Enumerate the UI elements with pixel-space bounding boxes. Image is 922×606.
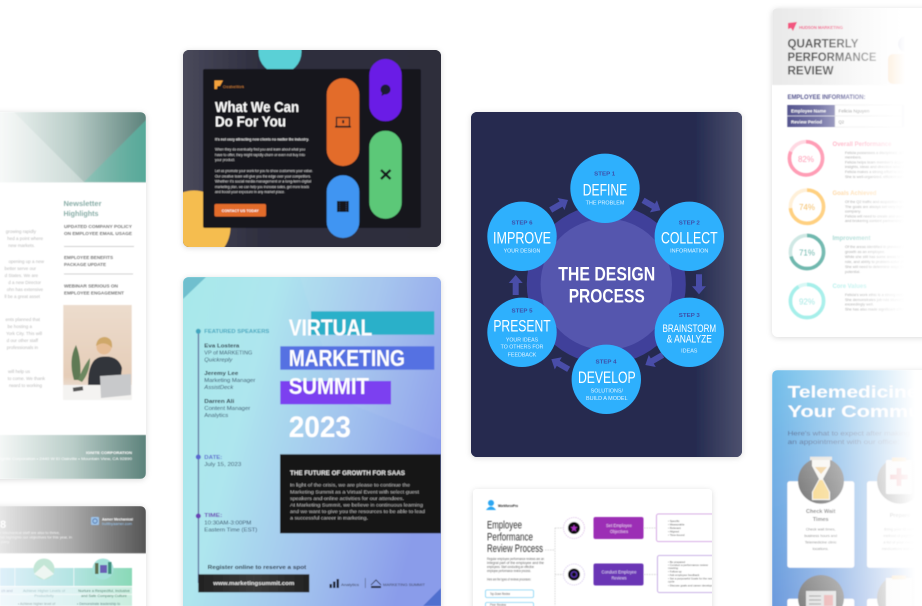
center hub [527, 205, 686, 364]
connector lines [545, 528, 657, 606]
subheading: Here's what to expect after making [788, 431, 910, 438]
card: lower left [787, 575, 854, 606]
table header row: Productivity [34, 594, 54, 598]
article text: better serve our [4, 266, 37, 271]
body text [215, 138, 313, 194]
timeline: DATE: [204, 455, 223, 461]
step: conduct employee reviews: Reviews [612, 576, 626, 580]
employee information table: Felicia Nguyen [838, 108, 870, 114]
timeline: Eastern Time (EST) [204, 528, 258, 534]
intro text: employees. Start conducting an effective [487, 565, 534, 569]
ring: overall performance: 82% [798, 155, 814, 164]
ring: core values: exceedingly well. [845, 302, 874, 306]
timeline: Content Manager [204, 406, 251, 412]
step 2 [655, 202, 724, 271]
ring: goals achieved [790, 190, 913, 223]
ring: improvement: Of the areas identified in previous periods [845, 245, 915, 249]
ring: improvement: Improvement [832, 236, 870, 242]
ring: goals achieved: Of the Q2 traffic and acquisition targets [845, 200, 911, 204]
body text: When they do eventually find you and learn about what you [215, 148, 305, 152]
article text: professionals in [7, 345, 38, 350]
card: prepare: method of payment, [883, 534, 917, 538]
description box: a successful career in marketing. [290, 516, 368, 521]
body text: Let us promote your work for you to show customers your value. [215, 169, 313, 173]
panel: newsletter [0, 112, 146, 479]
center hub: THE DESIGN [558, 265, 655, 286]
newsletter highlights: ON EMPLOYEE EMAIL USAGE [64, 231, 132, 236]
ring: improvement: growth as an employee. [845, 250, 885, 254]
title blocks: MARKETING [289, 345, 405, 371]
heading: Telemedicine In [788, 382, 922, 401]
article text [4, 229, 46, 388]
intro text: integral part of the employee and the [487, 561, 544, 565]
newsletter highlights: UPDATED COMPANY POLICY [64, 224, 132, 229]
title blocks [280, 311, 434, 444]
table header row: and Safe Company Culture [81, 594, 127, 598]
step 2: STEP 2 [679, 220, 700, 226]
review type boxes [486, 590, 534, 606]
body text: marketing plan, we can help you increase sales, get more leads [215, 185, 309, 189]
article text: hed a point where [7, 236, 43, 241]
step: conduct employee reviews [564, 556, 722, 592]
title blocks: VIRTUAL [289, 315, 372, 341]
body text: It's not easy attracting new clients no matter the industry. [215, 138, 309, 142]
step 5 [487, 298, 557, 367]
footer band [0, 435, 146, 479]
header band: Aamer Mechanical [102, 518, 133, 522]
timeline: July 15, 2023 [204, 462, 242, 468]
step 5: STEP 5 [512, 308, 533, 314]
step: conduct employee reviews: • Set a purposeful Goals for the next [668, 576, 713, 580]
illustration: team icon [92, 558, 114, 580]
ring: goals achieved: company. [845, 210, 861, 214]
timeline: Darren Ali [204, 399, 235, 405]
footer band: Ignite Corporation • 2440 W El Oakville • Mountain View, CA 92890 [0, 457, 132, 461]
employee information table: Employee Name [791, 108, 827, 114]
ring: core values: Felicia's work ethic is a strong reflection [845, 293, 912, 297]
ring: improvement: potential. [845, 270, 860, 274]
pill: orange laptop [327, 78, 359, 166]
heading: Employee [487, 520, 522, 532]
step 6: YOUR DESIGN [504, 248, 540, 254]
article text: ll be a great asset [4, 294, 41, 299]
panel: quarterly performance review [772, 8, 922, 337]
step: set employee objectives: • Measurable [668, 522, 685, 526]
step 1: STEP 1 [594, 172, 616, 178]
title blocks: 2023 [289, 411, 351, 444]
intro text: Here are the types of reviews processes: [487, 578, 531, 582]
header band: builtbyaamer.com [102, 522, 132, 526]
header band: that highlights our objectives for this year, in [0, 536, 72, 540]
article text: growing rapidly [6, 229, 37, 234]
step 4 [572, 345, 641, 414]
ring: goals achieved: 74% [799, 203, 815, 212]
description box: In light of the crisis, we are please to continue the [290, 483, 411, 488]
table header row: ch and [1, 589, 13, 593]
newsletter highlights [64, 201, 134, 296]
article text: rward to working [9, 383, 42, 388]
timeline: Analytics [204, 413, 229, 419]
intro text: Regular employee performance reviews are an [487, 557, 544, 561]
header band: REVIEW [788, 64, 834, 78]
pill: green cross [369, 131, 402, 219]
logo: WorkforcePro [498, 504, 518, 508]
card: prepare [867, 458, 922, 568]
timeline: Eva Lostera [204, 344, 240, 350]
ring: overall performance: Felicia makes a strong effort to educate [845, 170, 911, 174]
ring: core values: She demonstrates job role stunning [845, 298, 905, 302]
timeline: Quickreply [204, 358, 233, 364]
arrows [509, 194, 706, 375]
header band: PERFORMANCE [788, 50, 876, 64]
step: set employee objectives [564, 514, 722, 542]
timeline [196, 329, 270, 583]
header band [772, 8, 900, 85]
illustration: mountain icon [34, 558, 54, 580]
header band: HUDSON MARKETING [799, 25, 844, 30]
step 1: DEFINE [583, 182, 627, 200]
ring: core values [790, 284, 912, 318]
timeline: AssistDeck [203, 385, 234, 391]
card: prepare: Bring your ID card, [884, 528, 916, 532]
article text: new markets. [8, 243, 35, 248]
pill: blue film [327, 175, 359, 238]
step 3: & ANALYZE [667, 334, 712, 346]
step 5: FEEDBACK [508, 352, 536, 358]
table header row: • Achieve higher level of [18, 602, 55, 606]
ring: overall performance: members. [845, 156, 862, 160]
ring: goals achieved: and brokering content partnerships more [845, 219, 913, 223]
heading: Your Community [788, 402, 922, 421]
card: check wait times: Check wait times, [806, 528, 836, 532]
body text: Whether it's social media management or a long-term digital [215, 180, 311, 184]
step 3: STEP 3 [679, 313, 701, 319]
timeline: VP of MARKETING [204, 350, 252, 356]
step 4: BUILD A MODEL [586, 396, 628, 402]
article text: be hosting a [7, 324, 32, 329]
panel: the design process [468, 109, 745, 460]
step 5: TO OTHERS FOR [501, 345, 543, 351]
description box: Marketing Summit as a Virtual Event with select guest [290, 489, 420, 494]
ring: improvement: While she still has some areas to improve [845, 255, 915, 259]
step: conduct employee reviews: • Conduct a performance review [668, 563, 709, 567]
table header row: Achieve Higher Levels of [23, 589, 66, 593]
ring: core values: Core Values [832, 284, 867, 290]
article text: d a new Director [8, 280, 41, 285]
card: prepare: Prepare [890, 513, 910, 519]
panel: what we can do for you [181, 49, 443, 250]
article text: ents planned that [5, 317, 41, 322]
card: prepare: a list of your current [883, 540, 918, 544]
heading [214, 100, 300, 128]
register call to action: www.marketingsummit.com [212, 581, 295, 587]
ring: overall performance: She is well-organized, efficient with time [845, 175, 912, 179]
timeline: FEATURED SPEAKERS [204, 329, 270, 335]
step: conduct employee reviews: • Be prepared [668, 560, 686, 564]
step: set employee objectives: • Specific [668, 519, 680, 523]
logo [486, 500, 518, 510]
body text: have to offer, they might rapidly churn or even not buy into [215, 153, 305, 157]
step: set employee objectives: • Time-bound [668, 533, 685, 537]
panel: annual report [0, 506, 146, 606]
newsletter highlights: PACKAGE UPDATE [64, 262, 106, 267]
footer band: IGNITE CORPORATION [86, 451, 132, 455]
timeline: 10:30AM-3:00PM [204, 520, 251, 526]
description box: speakers and online activities for our attendees. [290, 496, 404, 501]
timeline: TIME: [204, 513, 223, 519]
step 1 [570, 154, 640, 223]
step: set employee objectives: • Aligned [668, 530, 679, 534]
step 6: IMPROVE [493, 230, 551, 248]
review type boxes: Top-Down Review [490, 592, 511, 596]
article text: opening up a new [8, 259, 45, 264]
step: set employee objectives: • Relevant [668, 526, 681, 530]
description box [280, 454, 441, 533]
description box: At Marketing Summit, we believe in continuous learning [290, 502, 424, 507]
step 6 [487, 202, 557, 271]
employee information table: Q2 [838, 120, 845, 124]
heading: What We Can [215, 99, 299, 116]
newsletter highlights: EMPLOYEE BENEFITS [64, 255, 113, 260]
newsletter highlights: Newsletter [64, 201, 102, 208]
card: check wait times: locations. [813, 547, 829, 551]
article text: d States. We are [5, 273, 38, 278]
card: check wait times: Telemedicine clinic [805, 540, 837, 544]
panel: virtual marketing summit [180, 274, 444, 606]
header band [0, 112, 146, 182]
step: conduct employee reviews: Conduct Employee [602, 570, 637, 574]
newsletter highlights: Highlights [64, 211, 99, 218]
ring: goals achieved: The goals are always set very high, and [845, 205, 912, 209]
article text: ohn has extensive [7, 287, 43, 292]
table header row: • Demonstrate leadership to [77, 602, 120, 606]
logo: CreativeWork [223, 85, 244, 89]
employee information table: Review Period [791, 120, 822, 124]
step 2: INFORMATION [670, 248, 708, 254]
register call to action: Register online to reserve a spot [208, 565, 306, 571]
heading: Performance [487, 531, 533, 543]
photo: woman at laptop [63, 305, 132, 400]
ring: improvement: 71% [799, 248, 815, 258]
panel: telemedicine in your community [772, 370, 922, 606]
card: check wait times: Check Wait [806, 509, 836, 515]
ring: improvement [788, 233, 892, 274]
subheading: an appointment with our office: [788, 439, 900, 446]
employee information table: EMPLOYEE INFORMATION: [788, 95, 866, 101]
ring: core values: She has also made significant effort to [845, 308, 909, 312]
step 4: SOLUTIONS/ [591, 388, 623, 394]
card: lower right [867, 575, 922, 606]
sponsor logos: MARKETING SUMMIT [383, 583, 425, 587]
center hub: PROCESS [569, 286, 645, 307]
logo [214, 80, 244, 89]
ring: goals achieved: Goals Achieved [832, 191, 877, 197]
description box: and we want to give you the resources to be able to lead [290, 509, 426, 514]
timeline: Marketing Manager [204, 378, 256, 384]
heading [788, 382, 922, 421]
article text: d our other staff [7, 338, 39, 343]
step 3: IDEAS [681, 348, 698, 354]
button [214, 204, 266, 216]
intro text: employee performance review process. [487, 569, 531, 573]
step 5: PRESENT [493, 318, 551, 336]
ring: improvement: role, and ability to problem-solve projects [845, 260, 914, 264]
description box: THE FUTURE OF GROWTH FOR SAAS [290, 470, 406, 477]
article text: will help us [8, 369, 31, 374]
sponsor logos: Analytics [341, 583, 359, 587]
header band: pany. [1, 540, 10, 544]
ring: goals achieved: Felicia will need to create and execute [845, 214, 909, 218]
step 6: STEP 6 [512, 220, 533, 226]
heading: Review Process [487, 543, 543, 555]
newsletter highlights: EMPLOYEE ENGAGEMENT [64, 290, 124, 296]
register call to action [198, 565, 309, 592]
ring: overall performance: Felicia helps team member's acquire insights [845, 160, 921, 164]
button: CONTACT US TODAY [222, 209, 259, 213]
body text: your product. [215, 158, 235, 162]
title blocks: SUMMIT [289, 373, 369, 399]
table header row [0, 568, 132, 606]
timeline: Jeremy Lee [204, 371, 239, 377]
ring: overall performance: insights, ideas and direction when possible. [845, 165, 918, 169]
step: conduct employee reviews: • Follow up [668, 570, 682, 574]
step: set employee objectives: Objectives [610, 529, 628, 534]
header band [0, 506, 146, 553]
employee information table [786, 94, 870, 128]
pill: purple chat [369, 59, 402, 121]
step 4: DEVELOP [578, 369, 636, 387]
step 5: YOUR IDEAS [506, 337, 538, 343]
step 1: THE PROBLEM [586, 201, 624, 207]
ring: core values: 92% [799, 298, 815, 306]
heading: Do For You [215, 114, 286, 130]
step: conduct employee reviews: • Discuss goals and career development [668, 584, 718, 588]
step: set employee objectives: Set Employee [606, 523, 633, 528]
article text: York City. This will [6, 331, 42, 336]
ring: overall performance: Overall Performance [832, 142, 892, 148]
step 2: COLLECT [661, 230, 718, 248]
header band: 8 [0, 519, 6, 531]
intro text [487, 557, 544, 582]
body text: and boost your exposure in any market place. [215, 190, 285, 194]
heading [487, 520, 543, 555]
card: prepare: medications with you. [882, 547, 918, 551]
step 4: STEP 4 [596, 359, 617, 365]
newsletter highlights: WEBINAR SERIOUS ON [64, 284, 118, 288]
table header row: Nurture a Respectful, Inclusive [78, 589, 130, 593]
ring: overall performance [787, 139, 892, 179]
step 3 [655, 298, 724, 367]
step: conduct employee reviews: meeting [668, 566, 678, 570]
header band: QUARTERLY [788, 36, 858, 50]
subheading [788, 431, 910, 446]
step: conduct employee reviews: cycle [668, 580, 675, 584]
body text: Our creative team will give you the edge over your competitors. [215, 174, 311, 178]
article text: to come. We thank [8, 376, 46, 381]
card: check wait times: business hours and [804, 534, 837, 538]
ring: improvement: She will need to determine ways to build [845, 265, 913, 269]
sponsor logos [330, 578, 425, 588]
step 3: BRAINSTORM [662, 323, 716, 335]
step: conduct employee reviews: • Ask employee feedback [668, 573, 700, 577]
card: check wait times: Times [813, 517, 829, 523]
panel: employee performance review process [473, 489, 722, 606]
card: check wait times [787, 457, 854, 568]
